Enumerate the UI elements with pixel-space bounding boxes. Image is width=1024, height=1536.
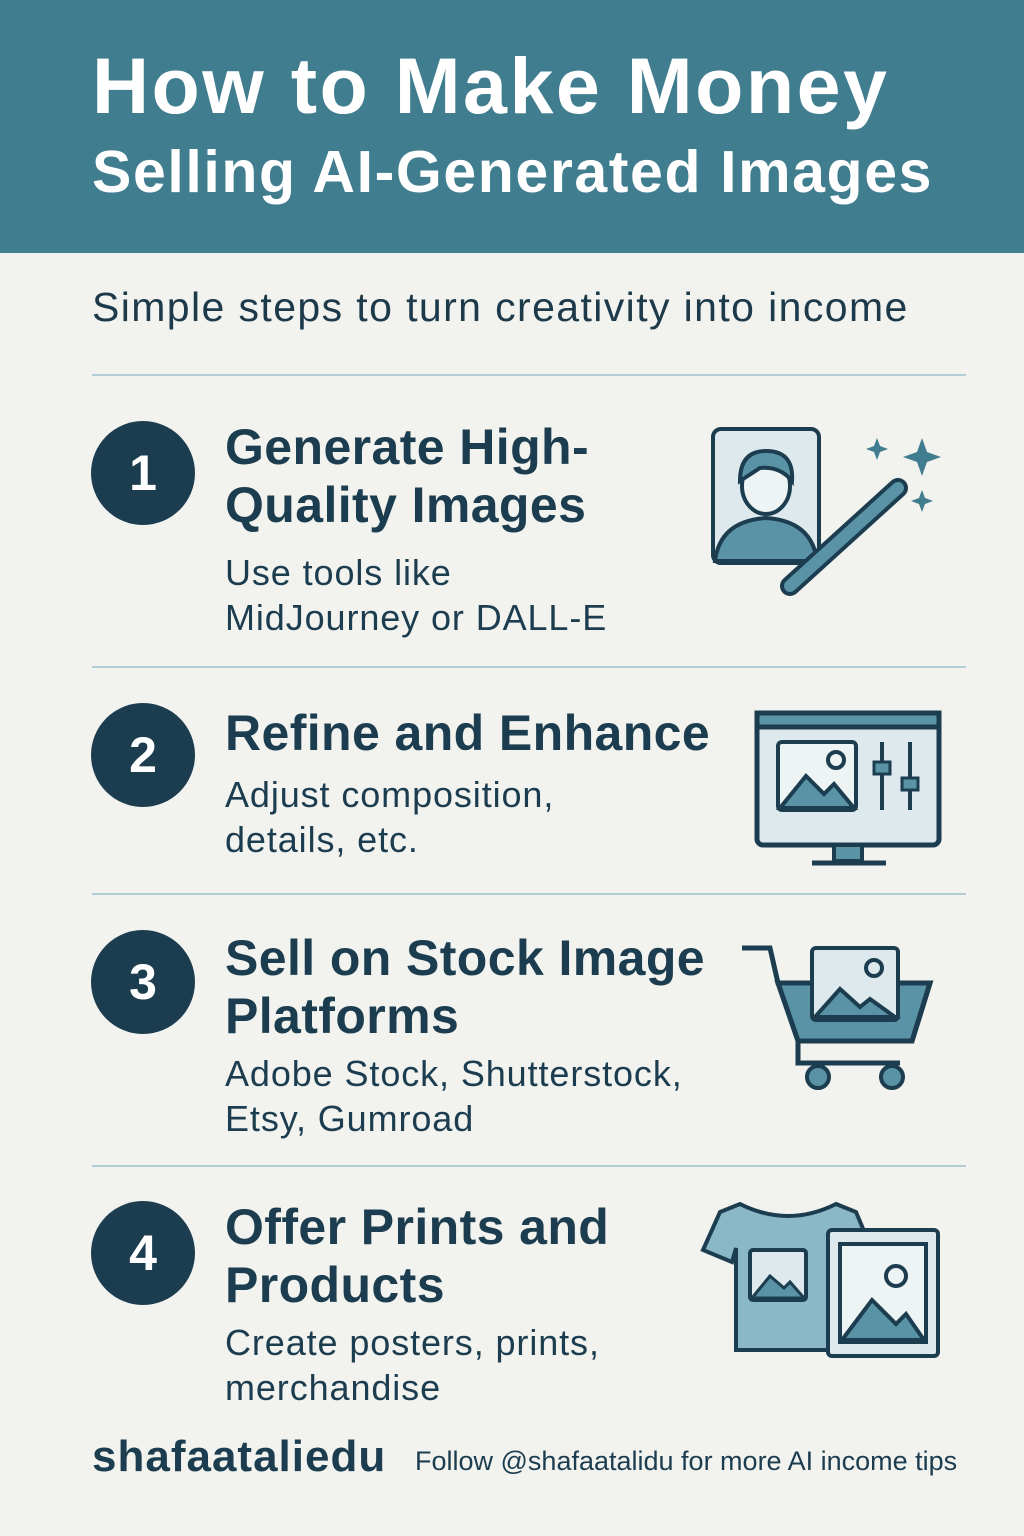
step 3 — [91, 930, 934, 1139]
desc 2: details, etc. — [225, 819, 419, 860]
desc 1 — [225, 552, 607, 638]
desc 1: MidJourney or DALL-E — [225, 597, 607, 638]
heading 1 — [225, 419, 589, 533]
title line 2: Selling AI-Generated Images — [92, 139, 933, 205]
icon: monitor — [754, 710, 942, 866]
number 3: 3 — [129, 954, 157, 1010]
heading 4 — [225, 1199, 609, 1313]
step 2 — [91, 703, 942, 866]
heading 2: Refine and Enhance — [225, 705, 710, 761]
number 1 — [91, 421, 195, 525]
heading 4: Products — [225, 1257, 445, 1313]
icon: cart — [742, 946, 934, 1090]
desc 3 — [225, 1053, 683, 1139]
heading 1: Generate High- — [225, 419, 589, 475]
heading 1: Quality Images — [225, 477, 586, 533]
desc 4: merchandise — [225, 1367, 441, 1408]
subtitle: Simple steps to turn creativity into income — [92, 284, 909, 330]
header banner — [0, 0, 1024, 253]
number 2: 2 — [129, 727, 157, 783]
desc 3: Etsy, Gumroad — [225, 1098, 474, 1139]
number 4 — [91, 1201, 195, 1305]
desc 2 — [225, 774, 554, 860]
heading 3: Platforms — [225, 988, 459, 1044]
number 2 — [91, 703, 195, 807]
title: How to Make Money — [92, 41, 889, 130]
heading 3: Sell on Stock Image — [225, 930, 705, 986]
desc 4 — [225, 1322, 600, 1408]
heading 3 — [225, 930, 705, 1044]
number 3 — [91, 930, 195, 1034]
step 4 — [91, 1199, 940, 1408]
heading 4: Offer Prints and — [225, 1199, 609, 1255]
desc 3: Adobe Stock, Shutterstock, — [225, 1053, 683, 1094]
number 1: 1 — [129, 445, 157, 501]
footer brand: shafaataliedu — [92, 1432, 386, 1481]
desc 2: Adjust composition, — [225, 774, 554, 815]
icon: t-shirt and print — [700, 1202, 940, 1358]
desc 1: Use tools like — [225, 552, 452, 593]
desc 4: Create posters, prints, — [225, 1322, 600, 1363]
footer follow text: Follow @shafaatalidu for more AI income tips — [415, 1446, 957, 1476]
number 4: 4 — [129, 1225, 157, 1281]
step 1 — [91, 419, 941, 638]
icon: portrait with wand — [711, 427, 941, 596]
